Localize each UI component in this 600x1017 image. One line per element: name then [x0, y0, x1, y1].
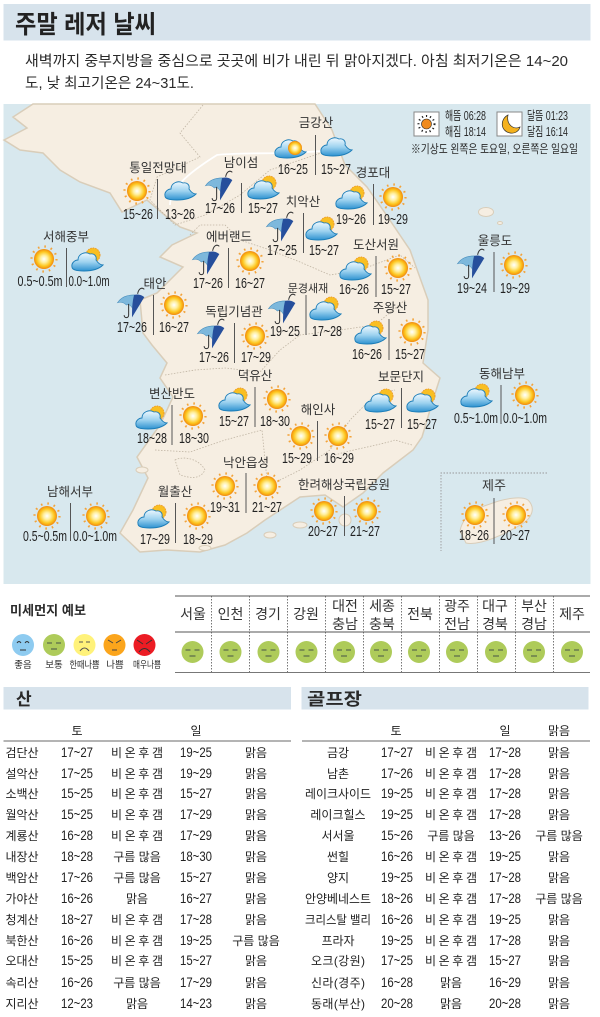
table: 골프장: 17~28 — [489, 785, 521, 801]
table: 골프장: 17~26 — [381, 765, 413, 781]
table: 골프장: 비 온 후 갬 — [425, 913, 477, 927]
table: 골프장: 비 온 후 갬 — [425, 787, 477, 801]
site: 변산반도: 변산반도 — [149, 387, 195, 401]
site: 보문단지: 15~27 — [407, 417, 437, 433]
fine dust table: 대구 — [482, 598, 508, 614]
table: 골프장: 일 — [499, 724, 511, 738]
site: 동해남부: 동해남부 — [479, 367, 525, 381]
table: 골프장: 맑음 — [548, 934, 570, 948]
site: 태안 — [117, 277, 189, 336]
table: 산: 북한산 — [5, 934, 39, 948]
site: 한려해상국립공원: 한려해상국립공원 — [298, 478, 390, 492]
table: 산: 15~25 — [61, 785, 93, 801]
table: 산: 오대산 — [5, 954, 39, 968]
table: 산: 15~25 — [61, 952, 93, 968]
table: 골프장: 비 온 후 갬 — [425, 871, 477, 885]
table: 골프장: 17~28 — [489, 869, 521, 885]
table: 골프장: 18~26 — [381, 890, 413, 906]
table: 골프장: 16~26 — [381, 911, 413, 927]
table: 산: 맑음 — [245, 892, 267, 906]
table: 산: 맑음 — [245, 913, 267, 927]
site: 낙안읍성: 21~27 — [252, 500, 282, 516]
table: 산: 구름 많음 — [113, 976, 161, 990]
site: 경포대: 19~29 — [378, 212, 408, 228]
table: 골프장: 13~26 — [489, 827, 521, 843]
site: 주왕산: 주왕산 — [373, 301, 408, 315]
table: 산: 구름 많음 — [232, 934, 280, 948]
site: 남해서부: 0.5~0.5m — [23, 529, 67, 545]
intro text — [25, 53, 568, 92]
table: 산: 맑음 — [126, 892, 148, 906]
table: 산: 17~29 — [180, 806, 212, 822]
table: 골프장: 17~28 — [489, 765, 521, 781]
site: 남이섬 — [205, 156, 279, 217]
section heading: 골프장: 골프장 — [307, 690, 362, 709]
table: 골프장: 구름 많음 — [535, 892, 583, 906]
table: 골프장: 비 온 후 갬 — [425, 808, 477, 822]
site: 낙안읍성: 19~31 — [210, 500, 240, 516]
sun and moon times legend — [411, 109, 578, 156]
table: 골프장: 맑음 — [548, 871, 570, 885]
table: 골프장: 맑음 — [440, 976, 462, 990]
table: 골프장: 안양베네스트 — [305, 892, 371, 906]
table: 골프장: 맑음 — [548, 724, 570, 738]
table: 골프장: 맑음 — [548, 850, 570, 864]
fine dust table: 경북 — [482, 616, 508, 632]
table: 골프장: 썬힐 — [327, 850, 349, 864]
site: 서해중부: 0.5~0.5m — [18, 274, 62, 290]
site: 도산서원: 16~26 — [339, 282, 369, 298]
table: 산: 맑음 — [245, 787, 267, 801]
site: 독립기념관: 독립기념관 — [205, 305, 263, 319]
table: 산: 15~27 — [180, 869, 212, 885]
site: 해인사: 해인사 — [301, 403, 336, 417]
table: 산 — [4, 724, 291, 1011]
site: 도산서원: 도산서원 — [353, 238, 399, 252]
section heading: 산: 산 — [16, 690, 32, 709]
site: 주왕산: 16~26 — [352, 347, 382, 363]
fine dust legend: 보통 — [45, 660, 63, 671]
table: 골프장: 19~25 — [489, 848, 521, 864]
fine dust table: 충북 — [369, 616, 395, 632]
site: 남해서부: 0.0~1.0m — [73, 529, 117, 545]
site: 독립기념관: 17~29 — [241, 350, 271, 366]
site: 주왕산: 15~27 — [395, 347, 425, 363]
table: 골프장: 양지 — [327, 871, 349, 885]
site: 태안: 16~27 — [159, 320, 189, 336]
table: 골프장: 금강 — [327, 746, 349, 760]
site: 보문단지 — [365, 370, 438, 433]
site: 금강산: 금강산 — [299, 116, 334, 130]
sea background — [4, 104, 590, 584]
site: 덕유산: 18~30 — [260, 414, 290, 430]
table: 골프장: 19~25 — [381, 869, 413, 885]
site: 월출산: 17~29 — [140, 532, 170, 548]
site: 도산서원: 15~27 — [381, 282, 411, 298]
site: 금강산 — [275, 116, 352, 178]
table: 산: 내장산 — [5, 850, 39, 864]
site: 한려해상국립공원: 20~27 — [308, 524, 338, 540]
site: 변산반도 — [136, 387, 209, 447]
fine dust legend — [12, 634, 161, 671]
table: 산: 토 — [71, 724, 83, 738]
section heading: 산 — [4, 687, 291, 710]
site: 남이섬: 남이섬 — [224, 156, 258, 170]
land: Korean peninsula — [4, 104, 440, 552]
table: 산: 맑음 — [245, 829, 267, 843]
table: 산: 19~25 — [180, 744, 212, 760]
table: 골프장: 맑음 — [548, 787, 570, 801]
table: 산: 비 온 후 갬 — [111, 808, 163, 822]
weather map panel — [4, 104, 590, 584]
table: 골프장: 20~28 — [489, 995, 521, 1011]
table: 산: 계룡산 — [5, 829, 39, 843]
site: 제주: 20~27 — [500, 528, 530, 544]
site: 서해중부 — [18, 230, 110, 290]
table: 골프장: 16~26 — [381, 848, 413, 864]
site: 동해남부 — [454, 367, 547, 427]
site: 덕유산 — [219, 369, 290, 430]
table: 산: 16~27 — [180, 890, 212, 906]
site: 제주 — [459, 478, 530, 544]
table: 산: 16~26 — [61, 974, 93, 990]
site: 독립기념관 — [197, 305, 271, 366]
table: 산: 17~29 — [180, 827, 212, 843]
table: 산: 19~29 — [180, 765, 212, 781]
site: 문경새재 — [268, 282, 342, 340]
site: 남이섬: 17~26 — [205, 201, 235, 217]
site: 통일전망대: 15~26 — [123, 207, 153, 223]
fine dust legend: 매우나쁨 — [133, 660, 161, 671]
title bar: 주말 레저 날씨 — [15, 11, 156, 39]
site: 해인사: 16~29 — [324, 451, 354, 467]
table: 산: 18~28 — [61, 848, 93, 864]
table: 산: 비 온 후 갬 — [111, 954, 163, 968]
table: 산: 비 온 후 갬 — [111, 913, 163, 927]
table: 산: 맑음 — [245, 808, 267, 822]
site: 낙안읍성 — [210, 456, 282, 516]
site: 울릉도: 19~24 — [457, 281, 487, 297]
fine dust table: 경기 — [255, 606, 281, 622]
fine dust table: 대전 — [332, 598, 358, 614]
intro text: 새벽까지 중부지방을 중심으로 곳곳에 비가 내린 뒤 맑아지겠다. 아침 최저기온은 14~20 — [25, 53, 568, 70]
intro text: 도, 낮 최고기온은 24~31도. — [25, 75, 194, 92]
table: 골프장: 동래(부산) — [311, 997, 365, 1011]
table: 산: 비 온 후 갬 — [111, 767, 163, 781]
site: 해인사 — [282, 403, 354, 467]
table: 골프장: 19~25 — [489, 911, 521, 927]
table: 골프장: 서서울 — [321, 829, 355, 843]
sun and moon times legend: 해뜸 06:28 — [445, 109, 486, 123]
table: 산: 청계산 — [5, 913, 39, 927]
site: 덕유산: 15~27 — [219, 414, 249, 430]
table: 골프장: 17~28 — [489, 932, 521, 948]
fine dust table: 전북 — [407, 606, 433, 622]
fine dust table: 서울 — [180, 606, 206, 622]
site: 보문단지: 보문단지 — [378, 370, 424, 384]
site: 금강산: 15~27 — [321, 162, 351, 178]
table: 골프장: 비 온 후 갬 — [425, 746, 477, 760]
table: 산: 비 온 후 갬 — [111, 746, 163, 760]
fine dust table: 광주 — [444, 598, 470, 614]
fine dust table: 부산 — [521, 598, 547, 614]
site: 치악산: 15~27 — [309, 243, 339, 259]
table: 산: 맑음 — [126, 997, 148, 1011]
table: 산: 17~26 — [61, 869, 93, 885]
site: 제주: 제주 — [482, 478, 506, 493]
table: 산: 16~28 — [61, 827, 93, 843]
table: 산: 검단산 — [5, 746, 39, 760]
table: 골프장: 19~25 — [381, 785, 413, 801]
table: 산: 14~23 — [180, 995, 212, 1011]
site: 치악산: 17~25 — [267, 243, 297, 259]
table: 골프장: 17~25 — [381, 952, 413, 968]
table: 골프장: 크리스탈 밸리 — [305, 913, 371, 927]
table: 골프장: 구름 많음 — [535, 829, 583, 843]
table: 골프장: 맑음 — [548, 954, 570, 968]
site: 경포대: 경포대 — [356, 166, 390, 180]
table: 산: 15~27 — [180, 952, 212, 968]
site: 남해서부 — [23, 485, 117, 545]
site: 주왕산 — [352, 301, 425, 363]
table: 골프장: 15~27 — [489, 952, 521, 968]
site: 한려해상국립공원 — [298, 478, 390, 540]
site: 덕유산: 덕유산 — [238, 369, 273, 383]
site: 해인사: 15~29 — [282, 451, 312, 467]
table: 산: 지리산 — [5, 997, 39, 1011]
table: 골프장: 17~27 — [381, 744, 413, 760]
table: 골프장: 맑음 — [548, 913, 570, 927]
site: 통일전망대: 통일전망대 — [129, 161, 187, 175]
table: 골프장: 구름 많음 — [427, 829, 475, 843]
site: 치악산: 치악산 — [286, 195, 321, 209]
table: 골프장: 남촌 — [327, 767, 349, 781]
site: 월출산: 18~29 — [183, 532, 213, 548]
table: 산: 18~30 — [180, 848, 212, 864]
table: 골프장: 맑음 — [548, 976, 570, 990]
table: 골프장: 토 — [390, 724, 402, 738]
site: 제주: 18~26 — [459, 528, 489, 544]
site: 치악산 — [266, 195, 339, 259]
table: 산: 가야산 — [5, 892, 39, 906]
table: 골프장: 19~25 — [381, 806, 413, 822]
table: 산: 맑음 — [245, 767, 267, 781]
table: 산: 맑음 — [245, 746, 267, 760]
table: 골프장: 비 온 후 갬 — [425, 850, 477, 864]
fine dust legend: 좋음 — [14, 660, 32, 671]
fine dust table: 충남 — [332, 616, 358, 632]
site: 변산반도: 18~28 — [137, 431, 167, 447]
site: 남이섬: 15~27 — [248, 201, 278, 217]
section heading: 골프장 — [302, 687, 588, 710]
site: 경포대 — [336, 166, 408, 228]
table: 산: 12~23 — [61, 995, 93, 1011]
table: 골프장 — [302, 724, 590, 1011]
table: 산: 16~26 — [61, 890, 93, 906]
table: 골프장: 16~29 — [489, 974, 521, 990]
table: 골프장: 레이크사이드 — [305, 787, 371, 801]
table: 골프장: 맑음 — [548, 808, 570, 822]
fine dust table: 제주 — [559, 606, 585, 622]
table: 산: 비 온 후 갬 — [111, 934, 163, 948]
table: 골프장: 오크(강원) — [311, 954, 365, 968]
site: 독립기념관: 17~26 — [199, 350, 229, 366]
table: 산: 소백산 — [5, 787, 39, 801]
table: 산: 맑음 — [245, 997, 267, 1011]
jeju box — [441, 473, 547, 551]
table: 골프장: 17~28 — [489, 806, 521, 822]
table: 산: 맑음 — [245, 850, 267, 864]
site: 에버랜드 — [192, 230, 265, 292]
table: 골프장: 비 온 후 갬 — [425, 892, 477, 906]
table: 산: 맑음 — [245, 871, 267, 885]
table: 산: 17~27 — [61, 744, 93, 760]
table: 골프장: 프라자 — [321, 934, 355, 948]
table: 골프장: 비 온 후 갬 — [425, 767, 477, 781]
table: 산: 비 온 후 갬 — [111, 787, 163, 801]
table: 골프장: 17~28 — [489, 744, 521, 760]
table: 산: 일 — [190, 724, 202, 738]
site: 문경새재: 19~25 — [270, 324, 300, 340]
table: 산: 19~25 — [180, 932, 212, 948]
sun and moon times legend: 달뜸 01:23 — [527, 109, 568, 123]
table: 산: 속리산 — [5, 976, 39, 990]
table: 산: 17~25 — [61, 765, 93, 781]
site: 에버랜드: 17~26 — [193, 276, 223, 292]
fine dust table: 강원 — [293, 606, 319, 622]
table: 골프장: 비 온 후 갬 — [425, 954, 477, 968]
site: 동해남부: 0.5~1.0m — [454, 411, 498, 427]
site: 울릉도: 19~29 — [500, 281, 530, 297]
table: 산: 비 온 후 갬 — [111, 829, 163, 843]
table: 산: 16~26 — [61, 932, 93, 948]
site: 변산반도: 18~30 — [179, 431, 209, 447]
table: 산: 맑음 — [245, 976, 267, 990]
fine dust heading: 미세먼지 예보 — [10, 603, 86, 618]
site: 동해남부: 0.0~1.0m — [503, 411, 547, 427]
fine dust table: 전남 — [444, 616, 470, 632]
table: 골프장: 맑음 — [440, 997, 462, 1011]
table: 골프장: 비 온 후 갬 — [425, 934, 477, 948]
fine dust table: 세종 — [369, 598, 395, 614]
sun and moon times legend: 해짐 18:14 — [445, 125, 486, 139]
site: 울릉도: 울릉도 — [478, 234, 512, 248]
fine dust table — [175, 596, 590, 672]
site: 태안: 17~26 — [117, 320, 147, 336]
site: 낙안읍성: 낙안읍성 — [223, 456, 269, 470]
fine dust table: 경남 — [521, 616, 547, 632]
fine dust table: 인천 — [218, 606, 243, 622]
fine dust legend: 한때나쁨 — [70, 660, 100, 671]
table: 산: 15~27 — [180, 785, 212, 801]
table: 골프장: 맑음 — [548, 767, 570, 781]
fine dust legend: 나쁨 — [106, 660, 124, 671]
site: 금강산: 16~25 — [278, 162, 308, 178]
table: 골프장: 20~28 — [381, 995, 413, 1011]
sun and moon times legend: 달짐 16:14 — [527, 125, 568, 139]
title bar — [4, 4, 590, 40]
table: 골프장: 16~28 — [381, 974, 413, 990]
site: 남해서부: 남해서부 — [47, 485, 93, 499]
table: 산: 맑음 — [245, 954, 267, 968]
site: 태안: 태안 — [143, 277, 167, 291]
table: 산: 18~27 — [61, 911, 93, 927]
site: 월출산 — [138, 485, 213, 548]
province boundaries — [150, 105, 330, 225]
site: 울릉도 — [457, 234, 530, 297]
site: 서해중부: 서해중부 — [43, 230, 89, 244]
table: 골프장: 맑음 — [548, 997, 570, 1011]
table: 산: 월악산 — [5, 808, 39, 822]
site: 문경새재: 문경새재 — [288, 282, 328, 295]
front line — [170, 150, 330, 205]
table: 골프장: 맑음 — [548, 746, 570, 760]
table: 산: 구름 많음 — [113, 850, 161, 864]
table: 산: 15~25 — [61, 806, 93, 822]
site: 문경새재: 17~28 — [312, 324, 342, 340]
table: 산: 구름 많음 — [113, 871, 161, 885]
table: 골프장: 17~28 — [489, 890, 521, 906]
islands — [136, 208, 532, 550]
site: 월출산: 월출산 — [158, 485, 193, 499]
table: 산: 17~28 — [180, 911, 212, 927]
table: 골프장: 레이크힐스 — [310, 808, 366, 822]
table: 골프장: 신라(경주) — [311, 976, 365, 990]
site: 보문단지: 15~27 — [365, 417, 395, 433]
site: 에버랜드: 에버랜드 — [206, 230, 252, 244]
table: 산: 백암산 — [5, 871, 39, 885]
site: 에버랜드: 16~27 — [235, 276, 265, 292]
site: 한려해상국립공원: 21~27 — [350, 524, 380, 540]
table: 산: 설악산 — [5, 767, 39, 781]
table: 골프장: 15~26 — [381, 827, 413, 843]
table: 골프장: 19~25 — [381, 932, 413, 948]
site: 통일전망대: 13~26 — [165, 207, 195, 223]
site: 서해중부: 0.0~1.0m — [68, 274, 110, 290]
site: 도산서원 — [339, 238, 411, 298]
site: 경포대: 19~26 — [336, 212, 366, 228]
site: 통일전망대 — [123, 161, 196, 223]
table: 산: 17~29 — [180, 974, 212, 990]
